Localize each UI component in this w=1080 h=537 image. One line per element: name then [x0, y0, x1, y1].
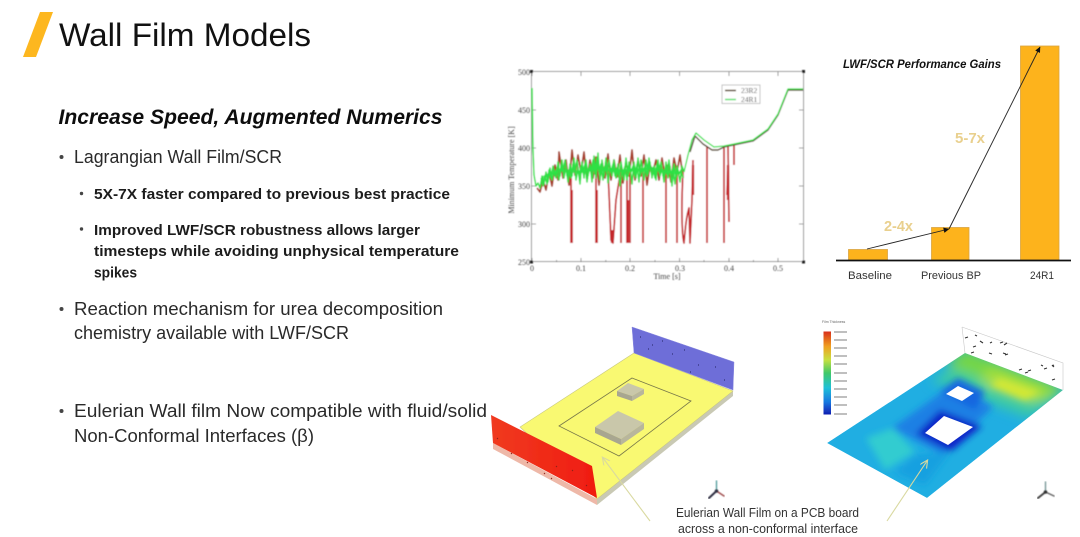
x axis labels: 0.2 — [625, 264, 635, 273]
board top: yellow film surface — [520, 353, 733, 499]
y axis labels: 400 — [518, 144, 530, 153]
3D model: PCB board geometry — [491, 327, 734, 505]
color legend — [822, 320, 847, 414]
line chart: minimum temperature vs time — [507, 68, 805, 281]
x axis title: Time [s] — [653, 272, 681, 281]
arrow: to heat map — [887, 461, 927, 521]
y axis labels: 450 — [518, 106, 530, 115]
bar labels: Previous BP — [921, 270, 981, 282]
bullet: Eulerian wall film: Non-Conformal Interfaces (β) — [74, 426, 314, 446]
bar labels — [848, 270, 1054, 282]
x axis labels: 0.5 — [773, 264, 783, 273]
section heading: Increase Speed, Augmented Numerics — [58, 105, 443, 129]
bullet: reaction mechanism: Reaction mechanism for urea decomposition — [74, 299, 443, 319]
bar chart: LWF/SCR performance gains — [836, 46, 1071, 282]
caption: Eulerian Wall Film on a PCB board — [676, 506, 859, 520]
title accent stripe — [23, 12, 53, 57]
x axis labels: 0.1 — [576, 264, 586, 273]
series: 24R1 — [532, 88, 803, 188]
bar labels: 24R1 — [1030, 270, 1054, 282]
y axis title: Minimum Temperature [K] — [507, 126, 516, 214]
x axis labels: 0.3 — [675, 264, 685, 273]
legend tick marks — [834, 332, 847, 414]
board side faces — [597, 391, 733, 505]
arrow: baseline to previous BP — [867, 229, 949, 249]
sub-bullet: robustness — [80, 222, 459, 282]
bar labels: Baseline — [848, 270, 892, 282]
title: Wall Film Models — [59, 17, 311, 53]
y axis labels: 500 — [518, 68, 530, 77]
red wall — [491, 415, 597, 498]
bullet: Eulerian wall film: Eulerian Wall film Now compatible with fluid/solid — [74, 401, 487, 421]
y axis labels: 300 — [518, 220, 530, 229]
bullet: reaction mechanism — [60, 299, 443, 343]
bar: 24R1 — [1020, 46, 1059, 260]
chip: large — [595, 411, 644, 445]
x axis labels: 0 — [530, 264, 534, 273]
icon: axis triad right — [1038, 482, 1054, 498]
sub-bullet: robustness: spikes — [94, 264, 137, 282]
sub-bullet: robustness: Improved LWF/SCR robustness allows larger — [94, 222, 420, 239]
chart legend: 24R1 — [741, 95, 758, 104]
bar: Previous BP — [932, 228, 969, 260]
bar: Baseline — [848, 250, 888, 260]
chart legend — [722, 85, 760, 104]
y axis labels — [518, 68, 530, 267]
text block: key points — [58, 105, 487, 446]
bar chart title: LWF/SCR Performance Gains — [843, 59, 1001, 71]
bullet: Lagrangian Wall Film: Lagrangian Wall Film/SCR — [74, 147, 282, 167]
heat map chip cut-outs — [946, 386, 974, 401]
x axis labels: 0.4 — [724, 264, 734, 273]
wireframe wall with probe points — [962, 327, 1063, 390]
chart legend: 23R2 — [741, 86, 758, 95]
series: 23R2 spikes and noise — [537, 90, 803, 243]
sub-bullet: speed gain: 5X-7X faster compared to previous best practice — [94, 186, 450, 203]
bullet: Eulerian wall film — [60, 401, 487, 446]
gain label 2-4x: 2-4x — [884, 218, 914, 235]
y axis labels: 250 — [518, 258, 530, 267]
gain label 5-7x: 5-7x — [955, 130, 986, 147]
blue wall — [632, 327, 734, 390]
interface outline — [559, 378, 691, 456]
caption — [676, 506, 859, 536]
x axis labels — [530, 264, 783, 273]
arrow: to film surface — [603, 458, 650, 521]
arrow: previous BP to 24R1 — [949, 47, 1040, 229]
chip: small — [617, 383, 644, 401]
heat map: film thickness on board — [827, 348, 1068, 498]
caption: across a non-conformal interface — [678, 522, 858, 536]
icon: axis triad left — [709, 481, 724, 498]
sub-bullet: robustness: timesteps while avoiding unphysical temperature — [94, 243, 459, 260]
y axis labels: 350 — [518, 182, 530, 191]
legend title: Film Thickness — [822, 320, 846, 324]
bullet: reaction mechanism: chemistry available with LWF/SCR — [74, 323, 349, 343]
